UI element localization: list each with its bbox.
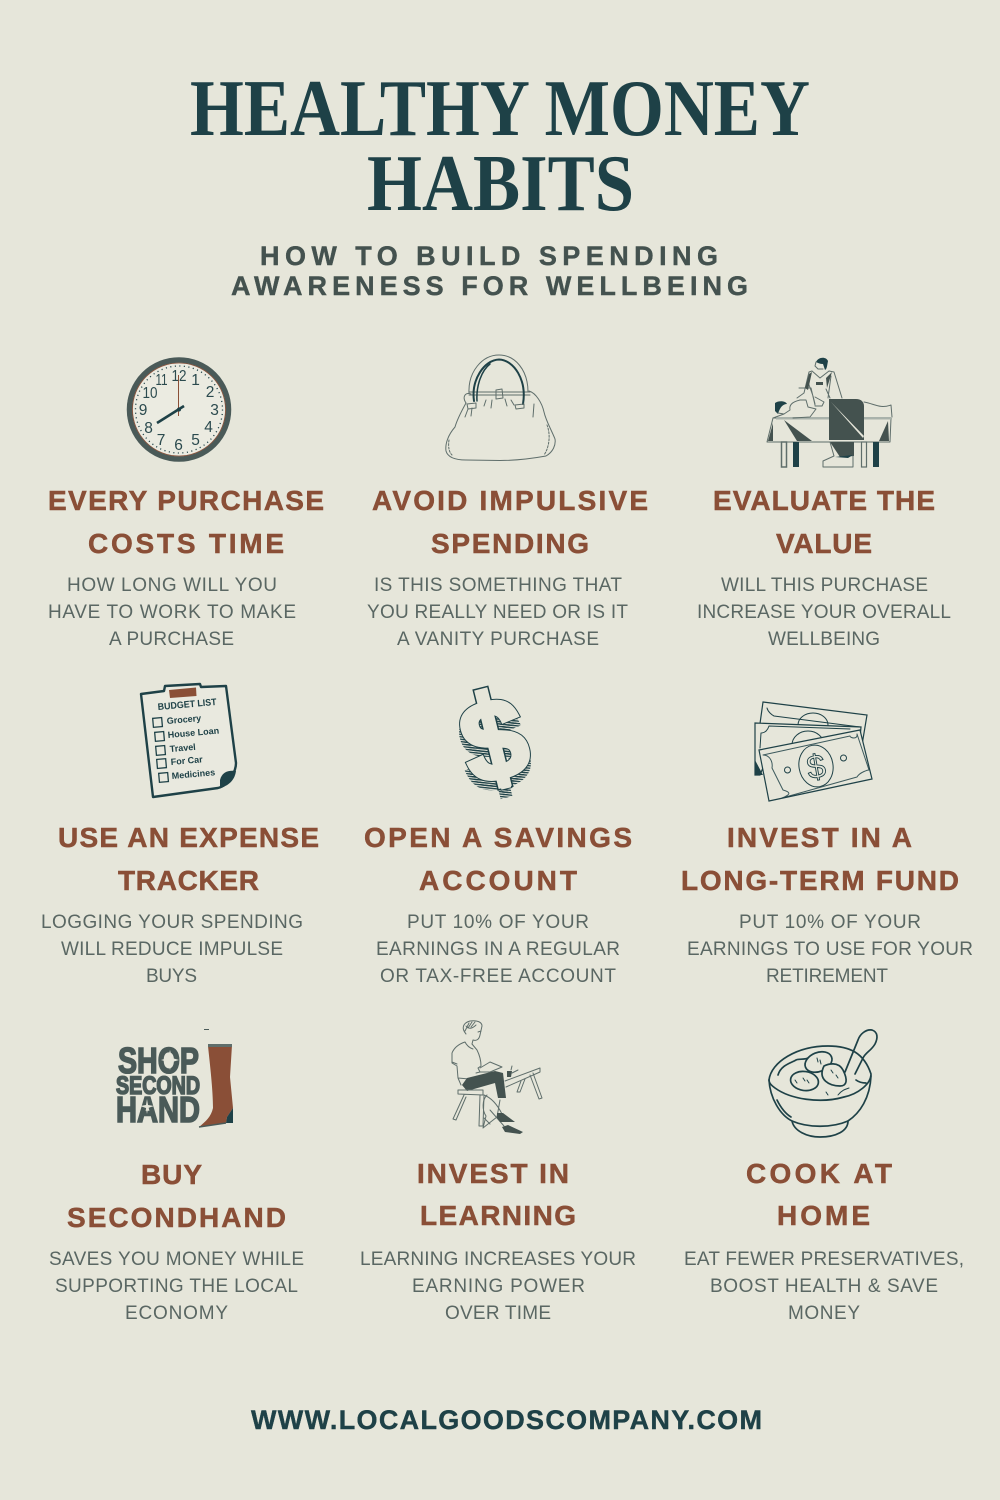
panel: every purchase costs time <box>48 360 324 650</box>
icon: clock: 10 <box>142 385 158 402</box>
heading: SECONDHAND <box>67 1202 286 1233</box>
text block: BUYS <box>146 966 197 987</box>
heading <box>746 1158 892 1231</box>
text block: RETIREMENT <box>766 966 888 987</box>
text block: INCREASE YOUR OVERALL <box>697 602 951 623</box>
text block: MONEY <box>788 1303 860 1324</box>
text block: PUT 10% OF YOUR <box>407 912 589 933</box>
text block <box>697 575 951 650</box>
heading <box>417 1158 576 1231</box>
text block: EARNINGS TO USE FOR YOUR <box>687 939 973 960</box>
text block: HOW LONG WILL YOU <box>67 575 277 596</box>
title <box>190 63 810 228</box>
heading: EVERY PURCHASE <box>48 485 324 516</box>
heading: OPEN A SAVINGS <box>364 822 632 853</box>
heading: INVEST IN <box>417 1158 569 1189</box>
icon: budget list <box>141 684 236 797</box>
panel: open a savings account <box>364 672 632 987</box>
heading: LONG-TERM FUND <box>681 865 959 896</box>
icon: clock: 5 <box>191 432 200 449</box>
icon: clock <box>130 360 228 459</box>
subtitle: AWARENESS FOR WELLBEING <box>231 271 748 301</box>
icon: clock: 11 <box>156 372 168 389</box>
text block: EAT FEWER PRESERVATIVES, <box>684 1249 964 1270</box>
text block: LEARNING INCREASES YOUR <box>360 1249 636 1270</box>
heading <box>372 485 648 559</box>
icon: clock: 12 <box>172 368 186 385</box>
panel: cook at home <box>684 1030 964 1324</box>
icon: budget list: Grocery <box>166 713 202 726</box>
icon: clock: 3 <box>210 402 219 419</box>
heading: ACCOUNT <box>419 865 577 896</box>
icon: clock: 9 <box>139 402 147 419</box>
heading <box>58 822 319 896</box>
text block: SUPPORTING THE LOCAL <box>55 1276 298 1297</box>
icon: clock: 7 <box>157 432 165 449</box>
icon: clock: 6 <box>174 437 183 454</box>
icon: banknotes: $ <box>804 747 828 786</box>
text block <box>360 1249 636 1324</box>
icon: shop second hand boot <box>116 1029 233 1130</box>
icon: clock: 1 <box>191 372 200 389</box>
icon: budget list: House Loan <box>167 726 219 740</box>
text block: IS THIS SOMETHING THAT <box>374 575 622 596</box>
panel: invest in learning <box>360 1021 636 1324</box>
icon: massage table <box>767 358 892 467</box>
text block: ECONOMY <box>125 1303 228 1324</box>
text block: WELLBEING <box>768 629 880 650</box>
text block: A PURCHASE <box>109 629 234 650</box>
heading: SPENDING <box>431 528 589 559</box>
icon: dollar sign: $ <box>448 672 540 810</box>
icon: dollar sign: $ <box>448 680 540 818</box>
subtitle <box>231 241 748 301</box>
icon: clock: 8 <box>144 420 153 437</box>
heading: AVOID IMPULSIVE <box>372 485 648 516</box>
panel: buy secondhand <box>49 1029 304 1324</box>
heading: EVALUATE THE <box>713 485 935 516</box>
footer url: WWW.LOCALGOODSCOMPANY.COM <box>251 1405 762 1435</box>
text block <box>376 912 620 987</box>
icon: clock: 4 <box>204 419 213 436</box>
icon: man reading at table <box>452 1021 542 1134</box>
heading <box>48 485 324 559</box>
heading <box>67 1159 286 1233</box>
text block: OR TAX-FREE ACCOUNT <box>380 966 616 987</box>
icon: shop second hand boot: HAND <box>116 1089 200 1130</box>
text block: PUT 10% OF YOUR <box>739 912 921 933</box>
icon: dollar sign: $ <box>448 672 540 810</box>
icon: budget list: BUDGET LIST <box>157 697 217 713</box>
icon: budget list: Travel <box>169 742 196 754</box>
icon: budget list: Medicines <box>171 767 216 781</box>
panel: use an expense tracker <box>41 684 319 987</box>
icon: handbag <box>446 355 555 460</box>
panel: invest in a long-term fund <box>681 702 973 987</box>
text block: OVER TIME <box>445 1303 551 1324</box>
icon: clock: 2 <box>206 384 214 401</box>
icon: shop second hand boot: SHOP <box>118 1040 199 1081</box>
text block: WILL THIS PURCHASE <box>721 575 928 596</box>
panel: evaluate the value <box>697 358 951 650</box>
text block <box>367 575 628 650</box>
text block <box>48 575 296 650</box>
heading: TRACKER <box>118 865 259 896</box>
title: HEALTHY MONEY <box>190 63 810 153</box>
icon: shop second hand boot: SECOND <box>116 1072 200 1100</box>
icon: banknotes <box>755 702 872 801</box>
text block: YOU REALLY NEED OR IS IT <box>367 602 628 623</box>
title: HABITS <box>367 138 634 228</box>
heading <box>713 485 935 559</box>
heading: USE AN EXPENSE <box>58 822 319 853</box>
text block: HAVE TO WORK TO MAKE <box>48 602 296 623</box>
heading: BUY <box>141 1159 202 1190</box>
icon: budget list: For Car <box>170 754 204 767</box>
text block <box>49 1249 304 1324</box>
text block: A VANITY PURCHASE <box>397 629 599 650</box>
panel: avoid impulsive spending <box>367 355 648 650</box>
text block <box>687 912 973 987</box>
text block: LOGGING YOUR SPENDING <box>41 912 303 933</box>
text block: BOOST HEALTH & SAVE <box>710 1276 938 1297</box>
text block <box>41 912 303 987</box>
heading <box>364 822 632 896</box>
icon: bowl with spoon <box>769 1030 877 1137</box>
heading: VALUE <box>776 528 872 559</box>
heading: LEARNING <box>420 1200 576 1231</box>
heading <box>681 822 959 896</box>
text block <box>684 1249 964 1324</box>
subtitle: HOW TO BUILD SPENDING <box>260 241 718 271</box>
heading: COSTS TIME <box>88 528 284 559</box>
text block: EARNING POWER <box>412 1276 585 1297</box>
heading: INVEST IN A <box>727 822 912 853</box>
text block: WILL REDUCE IMPULSE <box>61 939 283 960</box>
text block: SAVES YOU MONEY WHILE <box>49 1249 304 1270</box>
heading: COOK AT <box>746 1158 892 1189</box>
text block: EARNINGS IN A REGULAR <box>376 939 620 960</box>
heading: HOME <box>777 1200 870 1231</box>
